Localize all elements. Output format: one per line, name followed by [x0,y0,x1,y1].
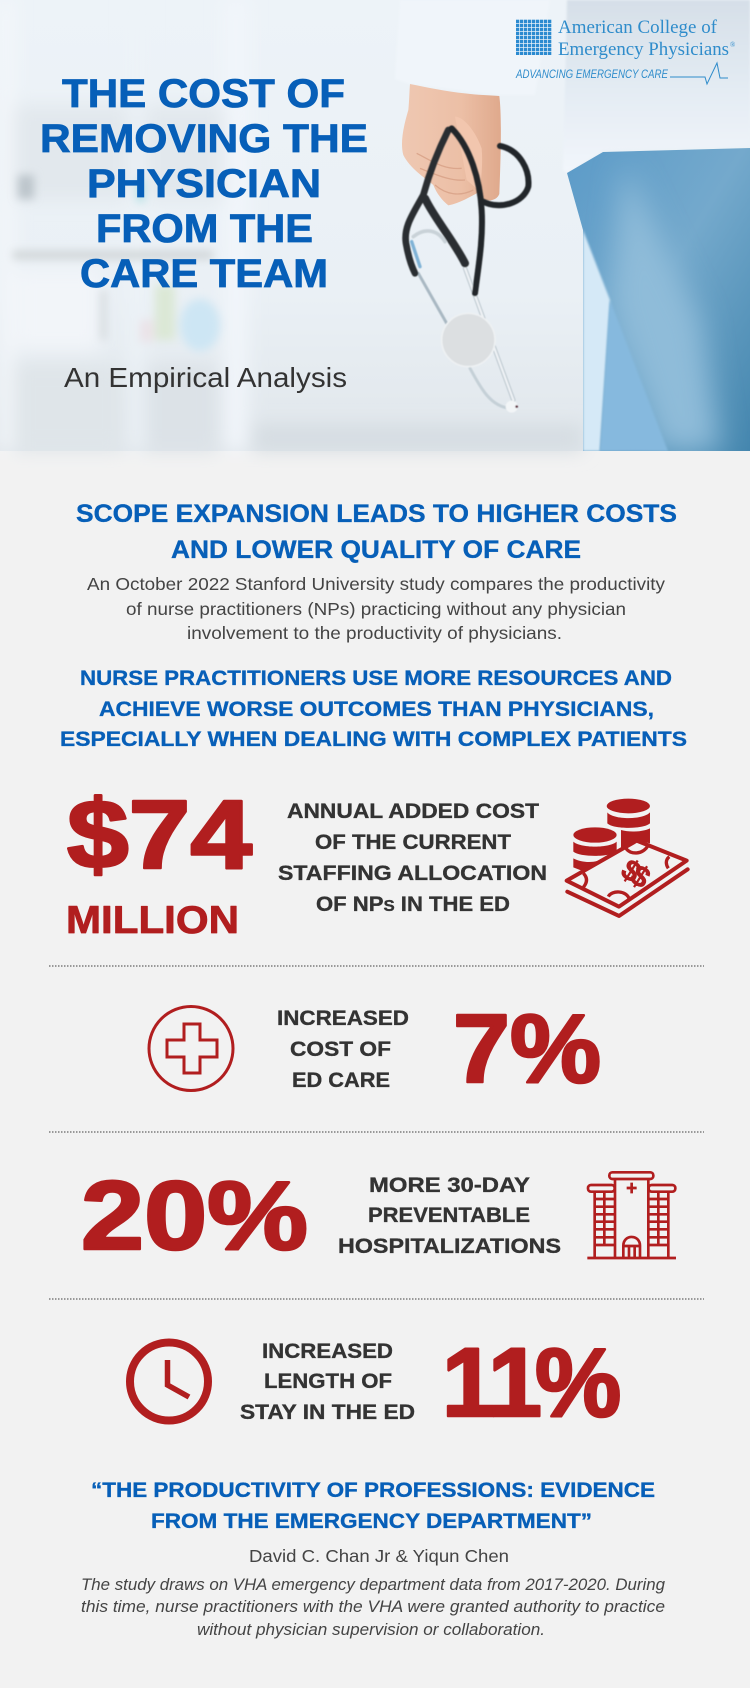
figure: 11%: 11% [442,1328,621,1437]
hand [402,84,501,205]
heading: scope expansion: SCOPE EXPANSION LEADS TO HIGHER COSTS [76,500,677,528]
panel: hero photo [0,0,750,451]
logo grid mark [516,19,552,55]
text block: study intro [87,574,665,643]
title: THE COST OF [62,72,345,116]
heading: study title: FROM THE EMERGENCY DEPARTMENT” [151,1510,592,1533]
heading: nurse practitioners: ACHIEVE WORSE OUTCOMES THAN PHYSICIANS, [99,697,654,721]
title: PHYSICIAN [87,162,321,206]
label: annual added cost: ANNUAL ADDED COST [287,800,539,823]
text block: study note [81,1576,666,1639]
logo wordmark [558,17,736,60]
label: annual added cost [278,800,547,916]
icon: coins and banknote: $$ [615,853,656,895]
heading: nurse practitioners: NURSE PRACTITIONERS USE MORE RESOURCES AND [80,666,672,690]
logo wordmark: ® [730,41,736,49]
label: increased length of stay: LENGTH OF [264,1370,392,1393]
label: increased cost of ED care: INCREASED [277,1007,409,1030]
label: increased length of stay: INCREASED [262,1340,393,1363]
heading: study title: “THE PRODUCTIVITY OF PROFESSIONS: EVIDENCE [91,1479,655,1502]
stat: 7% increased cost [149,994,601,1103]
label: more 30-day preventable hospitalizations: MORE 30-DAY [369,1174,530,1197]
logo: American College of Emergency Physicians [515,17,736,84]
figure: 20%: 20% [81,1161,308,1270]
coat [395,0,750,173]
icon: clock [130,1342,208,1420]
stat: 20% preventable hospitalizations [81,1161,676,1270]
heading: scope expansion: AND LOWER QUALITY OF CARE [171,536,581,564]
title: CARE TEAM [80,252,328,296]
heading: study title [91,1479,655,1533]
figure: million: MILLION [66,899,239,942]
label: more 30-day preventable hospitalizations [338,1174,561,1258]
label: increased length of stay: STAY IN THE ED [240,1401,415,1424]
label: annual added cost: STAFFING ALLOCATION [278,862,547,885]
label: increased cost of ED care [277,1007,409,1092]
label: more 30-day preventable hospitalizations: PREVENTABLE [368,1204,530,1227]
icon: medical cross [149,1006,233,1090]
icon: hospital building [587,1172,676,1258]
text block: study intro: involvement to the productivity of physicians. [187,623,562,643]
figure: $74: $74 [67,780,252,889]
title: FROM THE [96,207,313,251]
label: increased cost of ED care: COST OF [290,1038,391,1061]
heading: scope expansion [76,500,677,564]
text block: study note: The study draws on VHA emergency department data from 2017-2020. During [81,1576,666,1594]
heading: nurse practitioners: ESPECIALLY WHEN DEALING WITH COMPLEX PATIENTS [60,727,687,751]
stethoscope [406,128,528,413]
text block: study intro: of nurse practitioners (NPs) practicing without any physician [126,599,626,619]
label: annual added cost: OF THE CURRENT [315,831,511,854]
stat: 11% increased length of stay [130,1328,621,1437]
title: REMOVING THE [40,117,368,161]
scrubs [560,140,750,451]
subtitle: An Empirical Analysis [64,362,347,393]
text block: study intro: An October 2022 Stanford University study compares the productivity [87,574,665,594]
logo heartbeat line [670,63,728,84]
heading: nurse practitioners [60,666,687,751]
label: increased length of stay [240,1340,415,1424]
logo wordmark: Emergency Physicians [558,39,729,60]
icon: coins and banknote [567,799,688,916]
logo tagline: ADVANCING EMERGENCY CARE [515,69,668,81]
figure: 7%: 7% [453,994,601,1103]
label: annual added cost: OF NPS IN THE ED [316,893,510,916]
title [40,72,368,296]
text block: authors: David C. Chan Jr & Yiqun Chen [249,1546,509,1566]
label: increased cost of ED care: ED CARE [292,1069,390,1092]
dotted dividers [49,966,704,1299]
label: more 30-day preventable hospitalizations: HOSPITALIZATIONS [338,1235,561,1258]
logo wordmark: American College of [558,17,718,38]
text block: study note: without physician supervision or collaboration. [197,1621,545,1639]
stat: $74 million [66,780,688,942]
text block: study note: this time, nurse practitioners with the VHA were granted authority to practice [81,1598,665,1616]
